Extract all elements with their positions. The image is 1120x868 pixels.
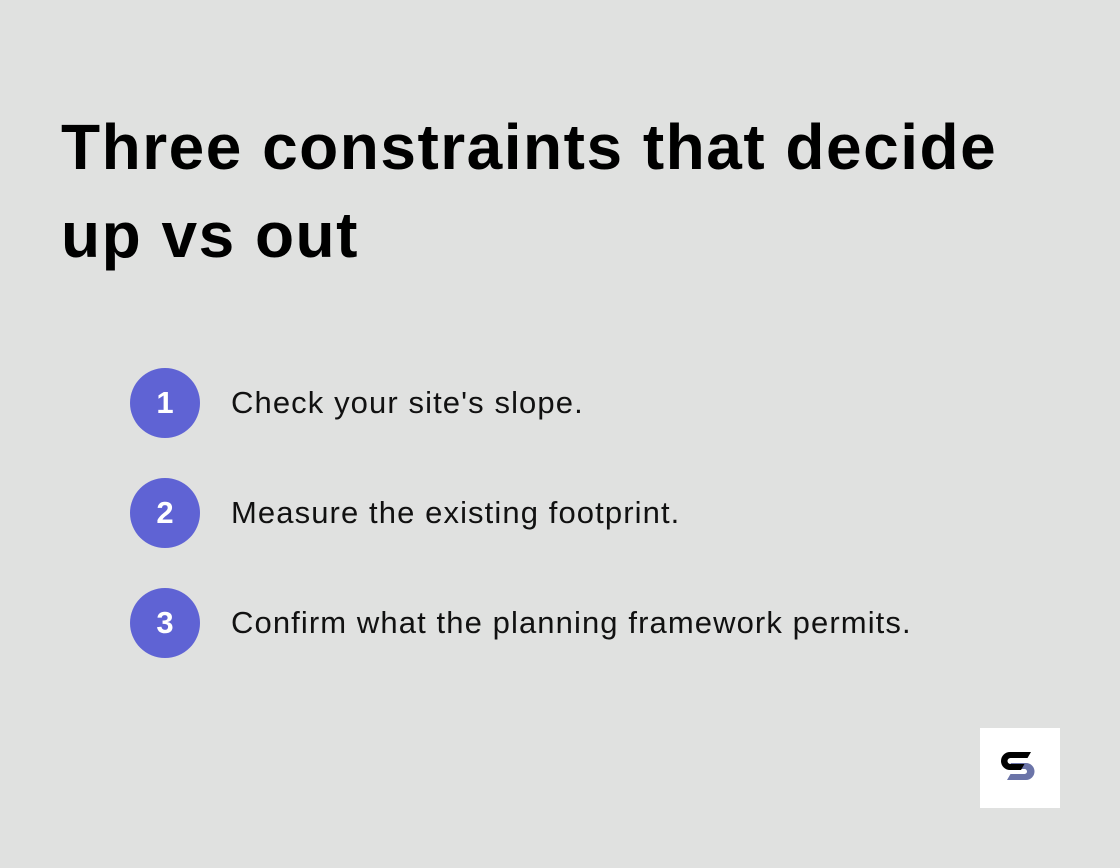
logo [980, 728, 1060, 808]
step 2 [130, 478, 680, 548]
step 3 [130, 588, 912, 658]
step 1: Check your site's slope. [231, 385, 584, 420]
step 3: 3 [156, 605, 174, 640]
step 2: 2 [156, 495, 174, 530]
step 1 [130, 368, 584, 438]
title: up vs out [61, 199, 359, 271]
title [61, 111, 997, 271]
title: Three constraints that decide [61, 111, 997, 183]
step 1: 1 [156, 385, 174, 420]
step 2: Measure the existing footprint. [231, 495, 680, 530]
step 3: Confirm what the planning framework permits. [231, 605, 912, 640]
